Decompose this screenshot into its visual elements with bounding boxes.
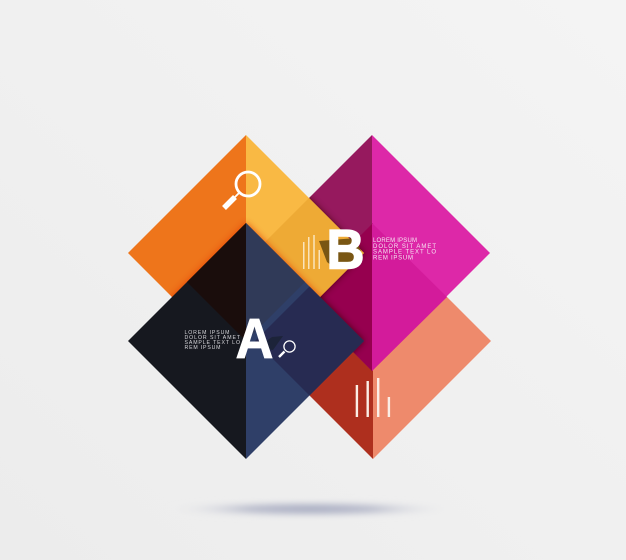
panel: dark diamond	[128, 223, 364, 459]
heading: letter A: A	[236, 307, 274, 371]
text block: A caption: DOLOR SIT AMET	[184, 335, 241, 341]
panel: coral diamond	[255, 223, 491, 459]
text block: A caption: REM IPSUM	[184, 345, 220, 351]
icon: orange bar chart	[303, 235, 320, 269]
text block: B caption: DOLOR SIT AMET	[373, 244, 436, 250]
icon: coral bar chart	[356, 378, 390, 417]
heading: letter B: B	[326, 218, 364, 280]
panel: orange diamond	[128, 135, 364, 297]
icon: magnifying glass large	[224, 172, 260, 208]
text block: A caption	[184, 330, 241, 351]
text block: A caption: LOREM IPSUM	[184, 330, 230, 336]
ground shadow	[165, 500, 455, 518]
text block: B caption	[373, 238, 436, 262]
icon: magnifying glass small	[279, 341, 295, 357]
panel: magenta diamond	[309, 135, 490, 371]
text block: B caption: LOREM IPSUM	[373, 238, 417, 244]
icon: B letter shadow	[319, 238, 362, 266]
text block: B caption: SAMPLE TEXT LO	[373, 250, 436, 256]
text block: B caption: REM IPSUM	[373, 256, 413, 262]
text block: A caption: SAMPLE TEXT LO	[184, 340, 240, 346]
icon: A letter shadow	[262, 336, 283, 350]
